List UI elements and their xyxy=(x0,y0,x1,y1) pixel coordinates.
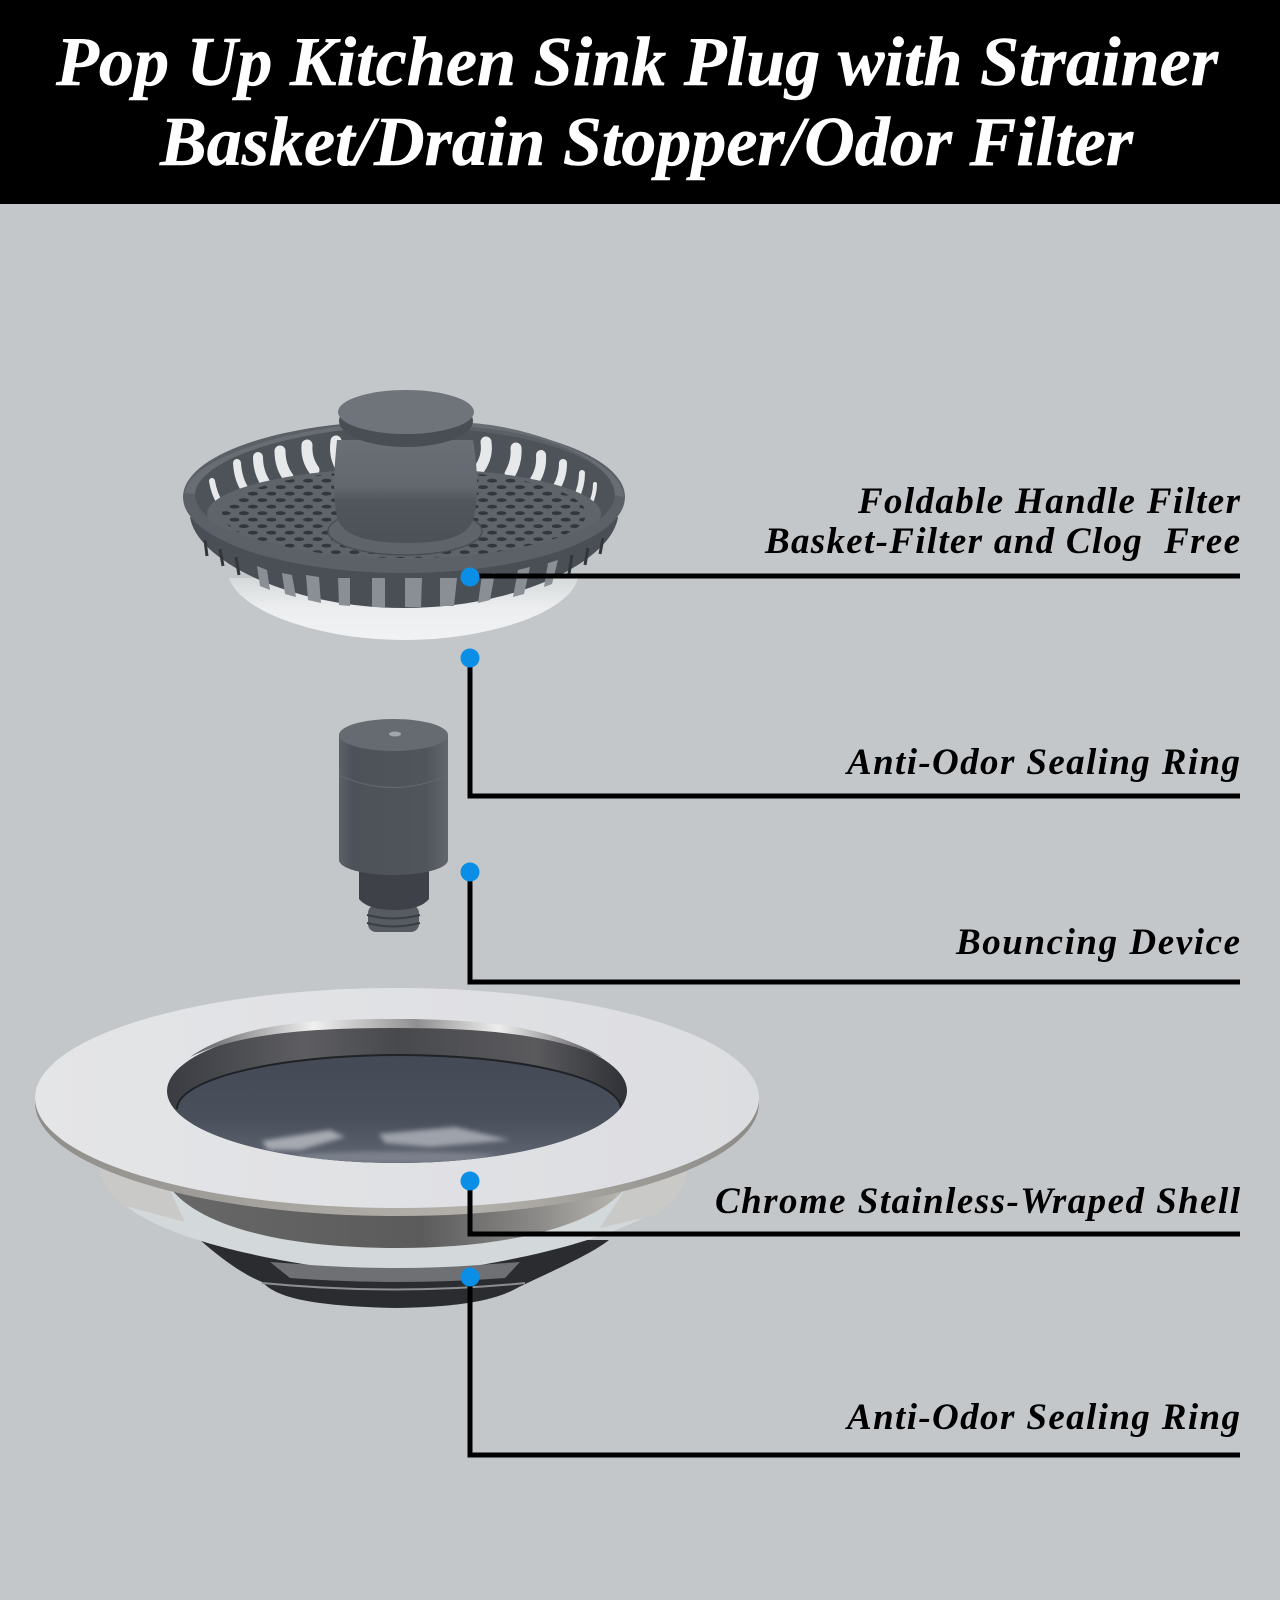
thread xyxy=(367,905,420,932)
callout: bouncing device xyxy=(460,862,1240,982)
title line 1: Pop Up Kitchen Sink Plug with Strainer xyxy=(55,24,1219,101)
grey basin xyxy=(177,1055,621,1163)
drain opening xyxy=(167,1019,627,1163)
lower threaded body xyxy=(200,1240,609,1308)
label: Basket-Filter and Clog Free xyxy=(764,521,1240,562)
cylinder body xyxy=(339,735,448,875)
label: Chrome Stainless-Wraped Shell xyxy=(715,1181,1241,1222)
title banner xyxy=(0,0,1280,204)
knob cap top xyxy=(338,390,474,434)
knob body xyxy=(334,440,477,543)
title line 2: Basket/Drain Stopper/Odor Filter xyxy=(159,104,1134,181)
back rim highlight xyxy=(185,422,624,497)
label: Anti-Odor Sealing Ring xyxy=(845,742,1240,783)
callout: foldable handle filter basket xyxy=(460,481,1241,586)
basket inner wall xyxy=(195,427,615,561)
label: Bouncing Device xyxy=(955,922,1240,963)
leader line xyxy=(470,658,1240,796)
callout: anti-odor sealing ring upper xyxy=(460,648,1240,796)
leader line xyxy=(470,1181,1240,1234)
basin highlights xyxy=(262,1130,345,1150)
chrome cup xyxy=(165,1170,631,1248)
flange steel edge xyxy=(35,990,759,1216)
callout: anti-odor sealing ring lower xyxy=(460,1268,1240,1455)
neck xyxy=(359,868,429,910)
steel sides above the ring xyxy=(100,1160,686,1228)
product part: drain shell xyxy=(35,988,759,1308)
label: Anti-Odor Sealing Ring xyxy=(845,1397,1240,1438)
marker dot xyxy=(460,648,480,668)
leader line xyxy=(470,574,1240,578)
marker dot xyxy=(460,1172,480,1190)
cylinder top xyxy=(339,719,448,751)
marker dot xyxy=(460,568,480,586)
marker dot xyxy=(460,1268,480,1286)
basket side wall with ribs xyxy=(190,517,618,608)
white sealing disc xyxy=(229,578,578,640)
centre knob flange xyxy=(328,507,482,555)
seam xyxy=(339,775,448,788)
callout: chrome stainless shell xyxy=(460,1172,1241,1234)
basket rim xyxy=(183,421,625,573)
perforated floor xyxy=(207,468,601,560)
marker dot xyxy=(460,862,480,882)
front rim lip xyxy=(183,497,625,573)
leader line xyxy=(470,1277,1240,1455)
anti-odor sealing ring xyxy=(100,1155,686,1268)
flange top surface xyxy=(35,988,759,1208)
rim slots xyxy=(212,441,595,505)
product part: foldable handle filter basket xyxy=(183,390,625,640)
leader line xyxy=(470,872,1240,982)
product part: bouncing device xyxy=(339,719,448,932)
label: Foldable Handle Filter xyxy=(857,481,1241,522)
knob cap edge xyxy=(339,395,473,447)
